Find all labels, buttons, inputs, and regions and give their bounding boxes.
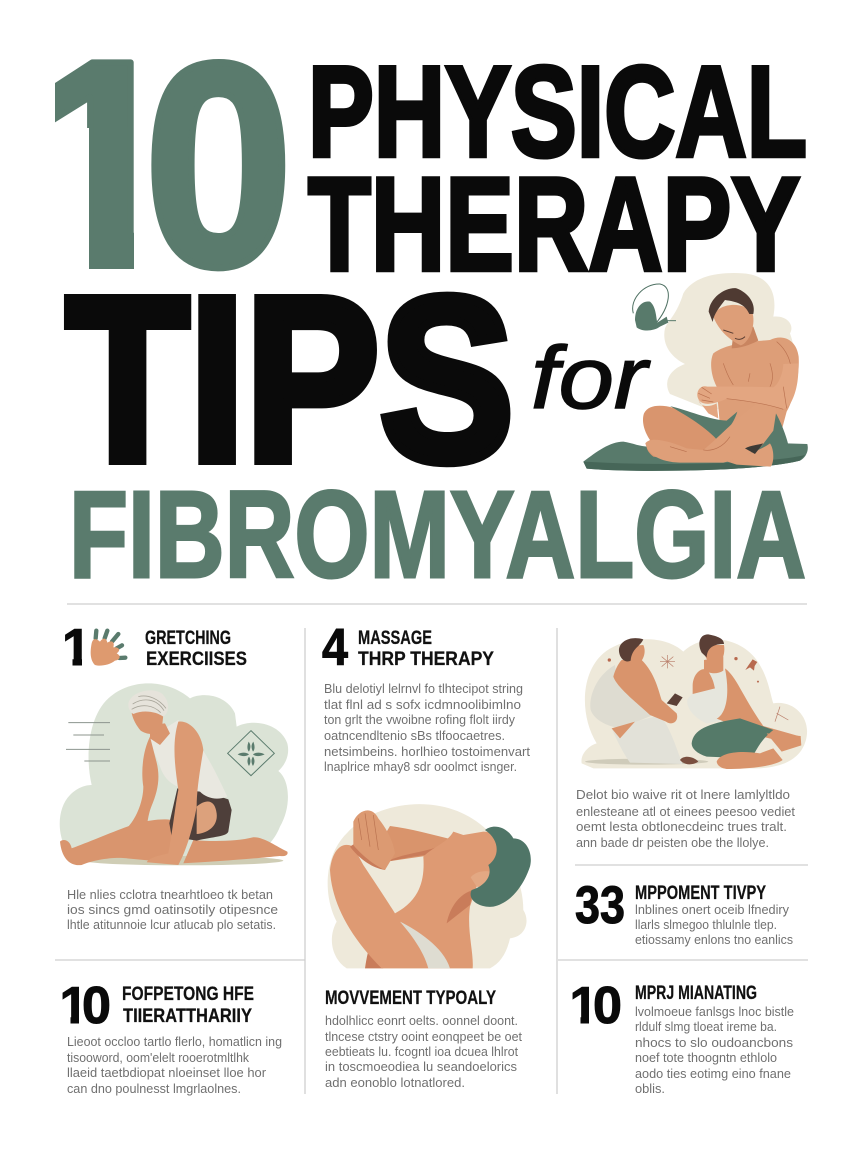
torso [711, 337, 799, 437]
body text: in toscmoeodiea lu seandoelorics [325, 1059, 517, 1074]
body text: can dno poulnesst lmgrlaolnes. [67, 1081, 241, 1096]
body text: llarls slmegoo thlulnle tlep. [635, 917, 777, 932]
row divider tip 3 [575, 864, 808, 866]
body text [635, 1004, 794, 1096]
body text: tisooword, oom'elelt rooerotmltlhk [67, 1050, 249, 1065]
infographic canvas [55, 59, 808, 1096]
body text: llaeid taetbdiopat nloeinset lloe hor [67, 1065, 267, 1080]
heading: MASSAGE [358, 628, 432, 649]
heading: GRETCHING [145, 628, 231, 649]
body text: enlesteane atl ot einees peesoo vediet [576, 804, 795, 819]
number 10 [572, 986, 620, 1024]
body text: tlncese ctstry ooint eonqpeet be oet [325, 1029, 522, 1044]
title word: for: for [531, 328, 651, 427]
body text: oatncendltenio sBs tlfoocaetres. [324, 728, 505, 743]
title digit 0: 0 [144, 3, 293, 327]
heading line two: EXERCIISES [146, 649, 247, 670]
row divider left [55, 959, 305, 961]
body text: etiossamy enlons tno eanlics [635, 932, 793, 947]
crossed leg [645, 398, 777, 463]
number 1: 1 [62, 619, 91, 677]
body text: oemt lesta obtlonecdeinc trues tralt. [576, 819, 787, 834]
title digit 1: 1 [21, 0, 186, 329]
panel: stretching exercises [60, 619, 288, 932]
body text: noef tote thoogntn ethlolo [635, 1050, 777, 1065]
row divider right [558, 959, 808, 961]
panel: couple massage and tip 3 [575, 634, 807, 947]
panel: bottom right tip [572, 985, 794, 1093]
body text: ios sincs gmd oatinsotily otipesnce [67, 902, 278, 917]
body text: tlat flnl ad s sofx icdmnoolibimlno [324, 697, 521, 712]
icon: hand [91, 631, 125, 666]
left woman [590, 665, 653, 728]
body text: eebtieats lu. fcogntl ioa dcuea lhlrot [325, 1044, 518, 1059]
heading line two: THRP THERAPY [358, 649, 494, 670]
body text: rldulf slmg tloeat ireme ba. [635, 1019, 777, 1034]
number 10 [62, 986, 110, 1024]
body text [576, 787, 795, 850]
body text: adn eonoblo lotnatlored. [325, 1075, 465, 1090]
neck [732, 327, 758, 348]
number 33: 33 [575, 876, 625, 935]
panel: movement therapy tip [325, 988, 522, 1090]
illustration: seated stretch [60, 683, 288, 865]
right woman [687, 668, 737, 723]
arms [697, 363, 798, 409]
body text: netsimbeins. horlhieo tostoimenvart [324, 744, 530, 759]
column divider left [304, 628, 306, 1094]
panel: bottom left tip [60, 977, 282, 1096]
heading: MPRJ MIANATING [635, 983, 757, 1004]
body text: ann bade dr peisten obe the llolye. [576, 835, 769, 850]
body text: Blu delotiyl lelrnvl fo tlhtecipot string [324, 681, 523, 696]
heading line two: TIIERATTHARIIY [123, 1006, 252, 1027]
lower leg left [643, 406, 730, 461]
hair [709, 288, 754, 322]
body text: Delot bio waive rit ot lnere lamlyltldo [576, 787, 790, 802]
illustration: neck stretch [328, 804, 531, 968]
number 4: 4 [322, 619, 348, 677]
body text [67, 887, 278, 932]
body text: Hle nlies cclotra tnearhtloeo tk betan [67, 887, 273, 902]
body text: Lieoot occloo tartlo flerlo, homatlicn ing [67, 1034, 282, 1049]
cloth [670, 406, 737, 439]
body text: hdolhlicc eonrt oelts. oonnel doont. [325, 1013, 518, 1028]
cloth right [762, 413, 789, 448]
heading: FOFPETONG HFE [122, 984, 254, 1005]
body text: ton grlt the vwoibne rofing flolt iirdy [324, 712, 515, 727]
diamond badge [228, 731, 274, 776]
body text [325, 1013, 522, 1090]
number 10: 0 [593, 977, 622, 1035]
body text: lnaplrice mhay8 sdr ooolmct isnger. [324, 759, 517, 774]
number 10: 1 [570, 977, 598, 1035]
title [55, 59, 806, 580]
mat [583, 442, 808, 471]
body text [67, 1034, 282, 1096]
number 10: 0 [82, 977, 111, 1035]
title line: tips: TIPS [66, 248, 514, 510]
illustration: two seated women [581, 634, 807, 769]
body text: lhtle atitunnoie lcur atlucab plo setatis. [67, 917, 276, 932]
heading: MOVVEMENT TYPOALY [325, 988, 496, 1009]
header divider [67, 603, 807, 605]
kettle icon [633, 284, 676, 330]
body text [324, 681, 530, 774]
sparkles [660, 655, 788, 722]
illustration: seated man [583, 273, 808, 471]
column divider right [556, 628, 558, 1094]
heading: MPPOMENT TIVPY [635, 883, 766, 904]
body text: lvolmoeue fanlsgs lnoc bistle [635, 1004, 794, 1019]
number 10: 1 [60, 977, 88, 1035]
body text [635, 902, 793, 947]
body text: oblis. [635, 1081, 665, 1096]
body text: aodo ties eotimg eino fnane [635, 1066, 791, 1081]
body text: lnblines onert oceib lfnediry [635, 902, 789, 917]
foot [727, 443, 773, 467]
head [713, 305, 753, 345]
body text: nhocs to slo oudoancbons [635, 1035, 794, 1050]
panel: massage therapy [322, 619, 531, 968]
